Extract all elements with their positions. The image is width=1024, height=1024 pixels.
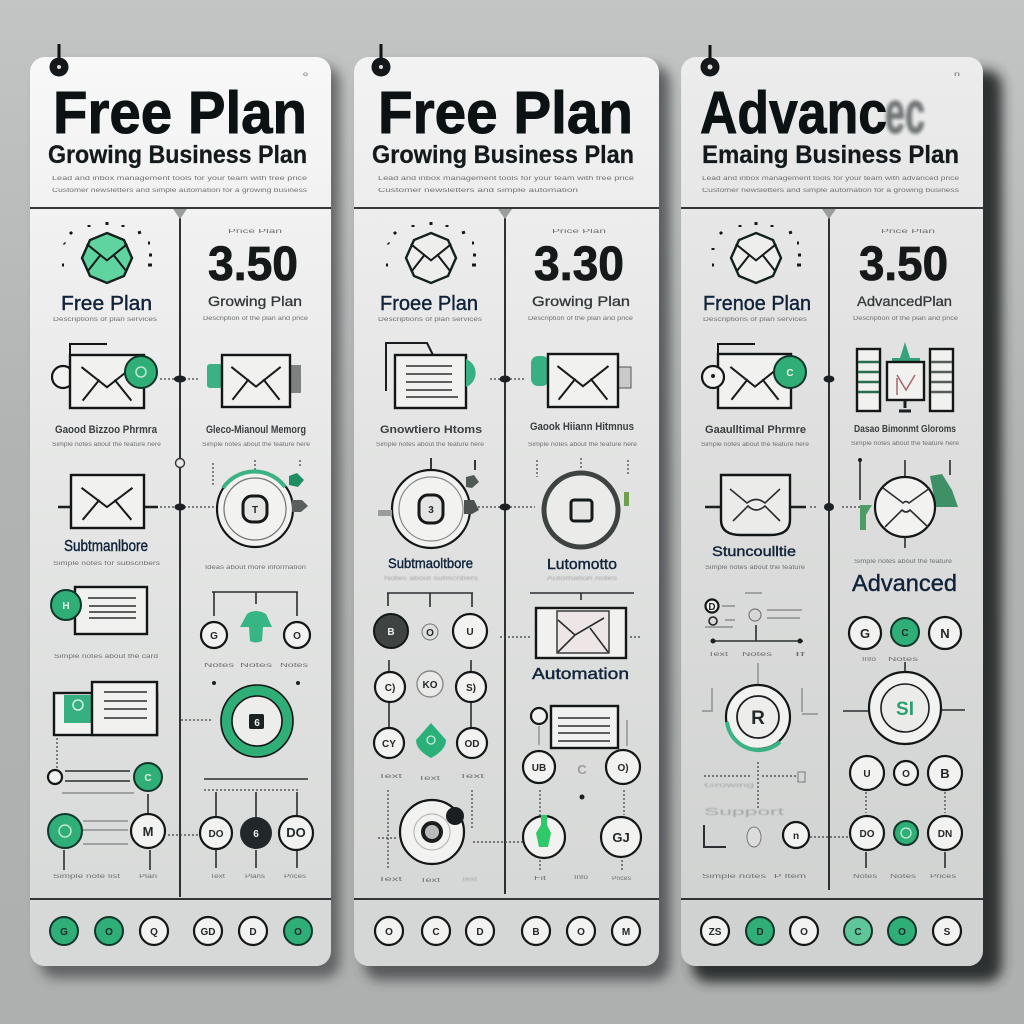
note: Automation notes (547, 576, 617, 582)
note row: Simple note list (53, 874, 121, 880)
icon: document card (51, 587, 147, 634)
description text (702, 176, 960, 194)
price: 3.50 (859, 238, 948, 291)
note row: Text (378, 877, 403, 883)
icon row: U (863, 769, 871, 780)
icon: stacked cards (54, 682, 157, 735)
footer icons: C (854, 927, 862, 938)
feature label: Dasao Bimonmt Gloroms (854, 424, 956, 435)
footer icons (50, 917, 312, 945)
price: 3.50 (208, 238, 298, 291)
note (384, 576, 617, 582)
icon row (850, 756, 962, 813)
icon tree: O (426, 628, 434, 639)
footer icons: G (60, 927, 68, 938)
icon row: DO (286, 825, 306, 840)
footer icons: B (532, 927, 540, 938)
icon tree: green shirt: O (293, 631, 301, 642)
faded chart area: Growing (704, 783, 754, 789)
connector dot (810, 503, 860, 511)
note row: Plan (139, 874, 157, 880)
green ring (181, 681, 300, 757)
icon: server racks and screen (857, 342, 953, 411)
icon row: C (577, 762, 587, 777)
price note: Description of the plan and price (203, 316, 309, 322)
icon row: green and glyph (523, 790, 641, 872)
faded chart area: n (793, 831, 799, 842)
icon: pin (50, 44, 68, 76)
description text: Customer newsletters and simple automation for a growing business (702, 188, 959, 194)
icon: dial (378, 790, 525, 870)
green ring: 6 (254, 718, 260, 729)
feature label: Gleco-Mianoul Memorg (206, 424, 306, 436)
icon row (523, 750, 640, 800)
note row (378, 875, 631, 884)
note row: Text (461, 877, 477, 883)
icon: outline envelope (712, 222, 801, 283)
feature label: Gaook Hiiann Hitmnus (530, 421, 634, 433)
note: Notes about subscribers (384, 576, 478, 582)
note: Simple notes for subscribers (53, 561, 160, 567)
icon row (374, 723, 487, 758)
description text: Lead and inbox management tools for your team with free price (52, 176, 308, 182)
price plan label: Growing Plan (532, 293, 630, 309)
connector (478, 504, 535, 510)
note: Simple notes about the card (54, 654, 158, 660)
label: Stuncoulltie (712, 543, 796, 559)
footer icons: D (756, 927, 764, 938)
icon row: OD (464, 739, 480, 750)
list row: C (144, 773, 152, 784)
list row: M (143, 824, 153, 839)
faded chart area (704, 762, 848, 848)
icon: envelope with tabs (207, 344, 301, 407)
footer icons: GD (200, 927, 216, 938)
icon row: N (940, 626, 950, 641)
footer icons: O (105, 927, 113, 938)
label: Lutomotto (547, 556, 617, 573)
icon: circled envelope (858, 458, 958, 548)
description text (52, 176, 308, 194)
feature label: Gaood Bizzoo Phrmra (55, 424, 158, 436)
icon row: UB (532, 763, 546, 774)
feature note: Simple notes about the feature here (202, 442, 311, 448)
panel: advanced plan (681, 45, 983, 966)
icon row: O (902, 769, 910, 780)
note row: Plans (245, 874, 265, 880)
feature note: Simple notes about the feature here (52, 442, 162, 448)
note row: If (795, 652, 806, 658)
icon: folder envelope: C (786, 368, 794, 379)
icon row: C (901, 628, 909, 639)
title: Free Plan (378, 80, 633, 146)
panel: free plan variant (354, 44, 659, 966)
automation label: Automation (532, 666, 629, 683)
price caption: Price Plan (552, 229, 606, 235)
advanced label: Advanced (852, 570, 957, 596)
footer icons (701, 917, 961, 945)
icon: pin (700, 45, 720, 76)
feature note: Simple notes about the feature here (376, 442, 485, 448)
ring left (702, 663, 818, 750)
note row (378, 774, 485, 782)
footer icons: S (944, 927, 951, 938)
note row: Notes (890, 874, 916, 880)
plan note: Descriptions of plan services (378, 317, 482, 323)
icon: dark ring (537, 458, 629, 547)
icon: folder envelope (702, 344, 806, 408)
list row (48, 794, 200, 870)
icon: ring with green leaf: T (252, 505, 258, 516)
note row (53, 874, 306, 880)
icon: ring with green leaf (213, 460, 308, 547)
price caption: Price Plan (881, 229, 935, 235)
small ring (176, 458, 184, 468)
corner mark: n (954, 72, 960, 78)
feature note: Simple notes about the feature here (528, 442, 638, 448)
description text: Lead and inbox management tools for your team with free price (378, 176, 635, 182)
connector (160, 376, 200, 382)
icon: ring with leaf: 3 (428, 505, 434, 516)
icon: envelope with tabs (531, 354, 631, 407)
note row: Prices (930, 874, 956, 880)
icon row: DO (860, 829, 875, 840)
note row: Text (459, 774, 485, 780)
icon row: B (940, 766, 950, 781)
lines (204, 779, 308, 868)
notes row: Notes (240, 663, 272, 669)
note row: Text (708, 652, 729, 658)
plan label: Free Plan (61, 293, 152, 315)
note row (708, 652, 918, 663)
footer icons: D (476, 927, 484, 938)
icon row (375, 660, 486, 728)
note row: P Item (774, 874, 806, 880)
icon: outline envelope (386, 222, 476, 283)
note row: Simple notes (702, 874, 766, 880)
plan label: Froee Plan (380, 293, 478, 315)
icon row: O) (617, 763, 629, 774)
corner mark: o (303, 72, 309, 78)
icon: rounded envelope (705, 475, 806, 535)
feature label: Gaaulltimal Phrmre (705, 424, 806, 436)
label: Subtmaoltbore (388, 555, 473, 571)
icon row: S) (466, 683, 476, 694)
connector dot (824, 376, 834, 382)
ring right: SI (896, 699, 914, 720)
price plan label: Growing Plan (208, 293, 302, 309)
subtitle: Growing Business Plan (48, 141, 307, 169)
icon row (850, 816, 962, 868)
description text: Customer newsletters and simple automation for a growing business (52, 188, 307, 194)
ring right (843, 662, 965, 744)
note row: Info (574, 875, 589, 881)
icon tree: B (387, 627, 395, 638)
price caption: Price Plan (228, 229, 282, 235)
settings list: D (708, 602, 716, 613)
icon: folder envelope (52, 344, 157, 408)
note row: Notes (742, 652, 772, 658)
description text: Lead and inbox management tools for your team with advanced price (702, 176, 960, 182)
footer icons: O (294, 927, 302, 938)
title: Free Plan (53, 80, 307, 146)
icon: document card: H (62, 601, 70, 612)
note row: Notes (853, 874, 877, 880)
price: 3.30 (534, 238, 624, 291)
note row: Prices (284, 874, 306, 880)
icon row: CY (382, 739, 396, 750)
footer icons: C (432, 927, 440, 938)
price note: Description of the plan and price (853, 316, 959, 322)
card icon (531, 706, 627, 748)
notes row: Notes (204, 663, 234, 669)
panel: free plan (30, 44, 331, 966)
icon row: G (860, 626, 870, 641)
note row: Text (210, 874, 225, 880)
title: ec (885, 80, 925, 146)
description text: Customer newsletters and simple automation (378, 188, 578, 194)
icon row: DO (208, 829, 224, 840)
note row: Fit (534, 876, 547, 882)
subtitle: Emaing Business Plan (702, 141, 959, 169)
subtitle: Growing Business Plan (372, 141, 634, 169)
icon row (849, 617, 961, 649)
icon row: KO (422, 680, 438, 691)
feature note: Simple notes about the feature here (701, 442, 810, 448)
footer icons: O (800, 927, 808, 938)
icon: ring with leaf (378, 458, 479, 548)
footer icons: Q (150, 927, 158, 938)
note row: Info (862, 657, 877, 663)
footer icons: O (385, 927, 393, 938)
note row: Notes (888, 657, 918, 663)
note row (702, 874, 956, 880)
note row: Text (420, 878, 441, 884)
price plan label: AdvancedPlan (857, 293, 952, 309)
icon tree (374, 593, 487, 648)
feature note: Simple notes about the feature here (851, 441, 960, 447)
icon row: 6 (253, 829, 259, 840)
price note: Description of the plan and price (528, 316, 634, 322)
ring left: R (751, 708, 765, 729)
note row: Text (418, 776, 441, 782)
connector (490, 376, 525, 382)
icon row: C) (385, 683, 395, 694)
note row: Prices (612, 876, 631, 882)
note: Ideas about more information (205, 565, 306, 571)
description text (378, 176, 635, 194)
icon: folder document (386, 343, 476, 408)
note: Simple notes about the feature (854, 559, 953, 565)
footer icons: O (898, 927, 906, 938)
icon row (200, 816, 313, 850)
icon tree: green shirt (201, 592, 310, 648)
settings list (705, 593, 803, 644)
footer icons: ZS (709, 927, 722, 938)
footer icons: O (577, 927, 585, 938)
plan note: Descriptions of plan services (53, 317, 157, 323)
icon: green envelope (62, 222, 152, 283)
icon tree: U (466, 627, 474, 638)
note: Simple notes about the feature (705, 565, 806, 571)
faded chart area: Support (704, 807, 784, 818)
plan note: Descriptions of plan services (703, 317, 807, 323)
notes row: Notes (280, 663, 308, 669)
icon tree: green shirt: G (210, 631, 218, 642)
icon: envelope (58, 475, 158, 528)
icon row: green and glyph: GJ (612, 830, 630, 845)
subscribe label: Subtmanlbore (64, 538, 148, 555)
icon: envelope frame (500, 593, 642, 658)
note row: Text (378, 774, 403, 780)
connector (160, 504, 215, 510)
list row (48, 738, 162, 793)
footer icons: M (622, 927, 630, 938)
plan label: Frenoe Plan (703, 293, 811, 315)
notes row (204, 663, 308, 669)
feature label: Gnowtiero Htoms (380, 424, 482, 436)
icon: pin (372, 44, 390, 76)
title: Advanc (700, 80, 887, 146)
icon row: DN (938, 829, 952, 840)
footer icons: D (249, 927, 257, 938)
footer icons (375, 917, 640, 945)
